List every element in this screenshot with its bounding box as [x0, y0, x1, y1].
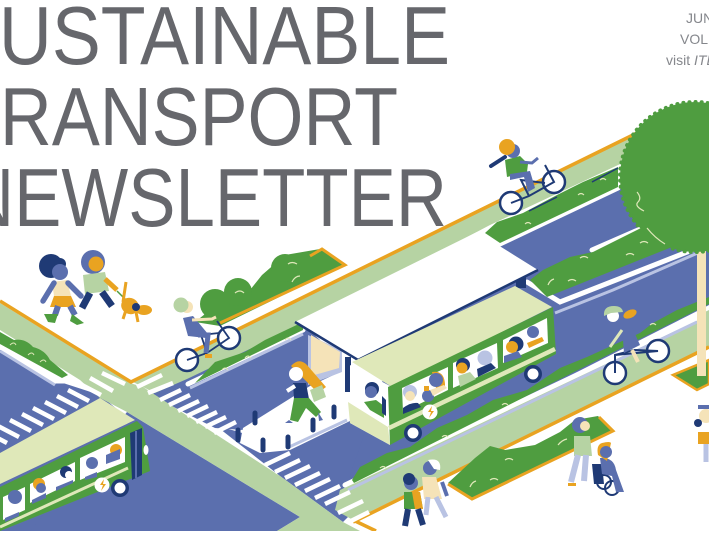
cyclist: green helmet: [174, 298, 240, 371]
sidewalk orange edges: [0, 133, 709, 531]
pedestrian: runner: [285, 361, 326, 423]
planter: lower road edge: [195, 322, 303, 383]
planter: centre median: [530, 227, 677, 297]
cyclist: top: [491, 139, 565, 214]
pedestrians: couple walking dog: [39, 250, 152, 325]
bollards: [238, 407, 334, 450]
left bus passengers: [5, 444, 122, 522]
left electric bus: [0, 398, 150, 531]
issue details text: [666, 10, 709, 68]
pedestrian: person at right edge: [694, 405, 709, 462]
street illustration: [0, 102, 709, 531]
planter: upper road edge: [195, 249, 345, 326]
bus passengers: [403, 326, 544, 414]
planter: lower bush bed: [448, 416, 613, 499]
sidewalks: [0, 133, 709, 531]
crosswalks: [0, 373, 369, 522]
pedestrians: wheelchair and helper: [568, 417, 624, 495]
planter: upper left: [0, 332, 68, 378]
title: [0, 0, 450, 244]
road surfaces: [0, 187, 709, 531]
cyclist: right: [604, 306, 669, 384]
bus driver: [364, 382, 386, 418]
white road curbs: [0, 188, 700, 485]
pedestrians: two walkers: [403, 459, 447, 526]
planter: upper right median: [485, 167, 618, 243]
tree: [620, 102, 709, 390]
road edge shading: [0, 252, 700, 490]
bus shelter: [295, 232, 538, 392]
main electric bus: [348, 286, 556, 445]
planter: long lower median: [352, 297, 709, 483]
platform: [240, 372, 352, 453]
